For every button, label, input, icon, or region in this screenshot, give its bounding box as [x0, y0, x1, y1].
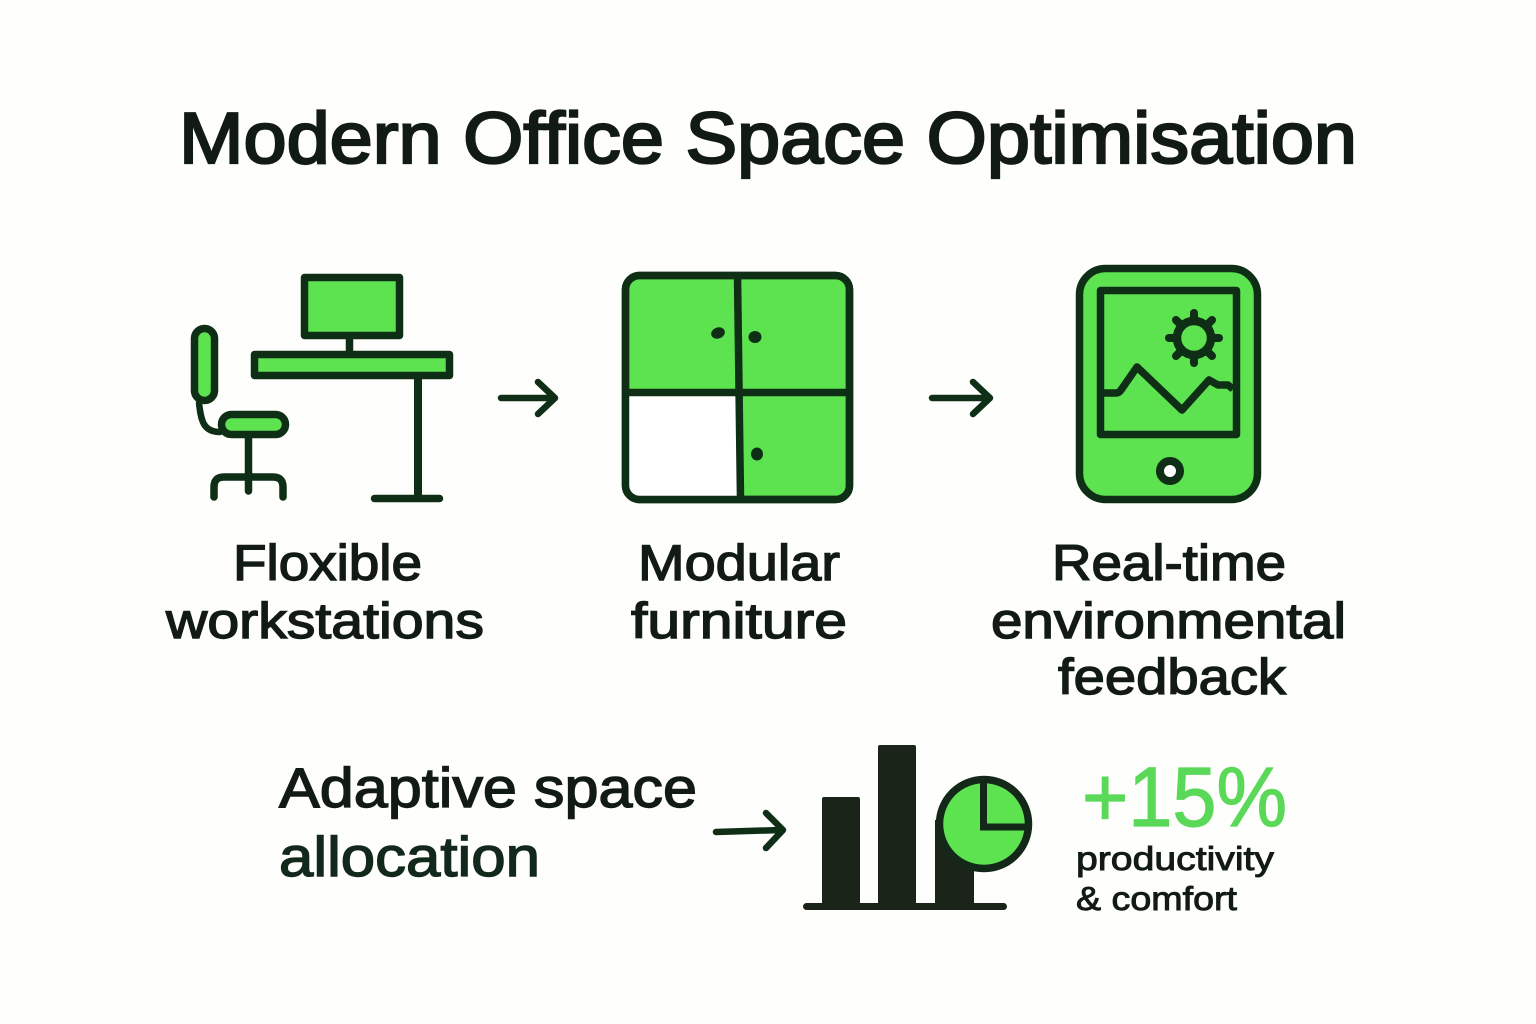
label: real-time environmental feedback: [991, 535, 1346, 705]
label: productivity and comfort: productivity: [1076, 840, 1275, 877]
chart: bars with pie: [803, 745, 1028, 910]
label: adaptive space allocation: Adaptive space: [279, 756, 697, 819]
title: Modern Office Space Optimisation: [179, 99, 1357, 179]
label: flexible workstations: [165, 535, 484, 649]
icon: tablet with environmental feedback: [1080, 268, 1258, 500]
label: modular furniture: [631, 535, 847, 649]
icon: desk and chair: [194, 278, 450, 498]
label: productivity and comfort: [1076, 840, 1275, 917]
label: flexible workstations: Floxible: [233, 535, 422, 591]
label: real-time environmental feedback: feedback: [1058, 649, 1287, 705]
label: productivity and comfort: & comfort: [1076, 880, 1237, 917]
label: adaptive space allocation: allocation: [279, 825, 540, 888]
label: modular furniture: furniture: [631, 593, 847, 649]
label: adaptive space allocation: [279, 756, 697, 888]
label: real-time environmental feedback: Real-time: [1052, 535, 1286, 591]
label: real-time environmental feedback: environmental: [991, 593, 1346, 649]
stat: +15%: +15%: [1082, 750, 1287, 844]
label: flexible workstations: workstations: [165, 593, 484, 649]
arrow: desk to furniture: [501, 382, 555, 414]
arrow: allocation to chart: [716, 813, 783, 848]
arrow: furniture to tablet: [932, 382, 990, 414]
label: modular furniture: Modular: [638, 535, 840, 591]
icon: modular furniture: [626, 276, 850, 500]
